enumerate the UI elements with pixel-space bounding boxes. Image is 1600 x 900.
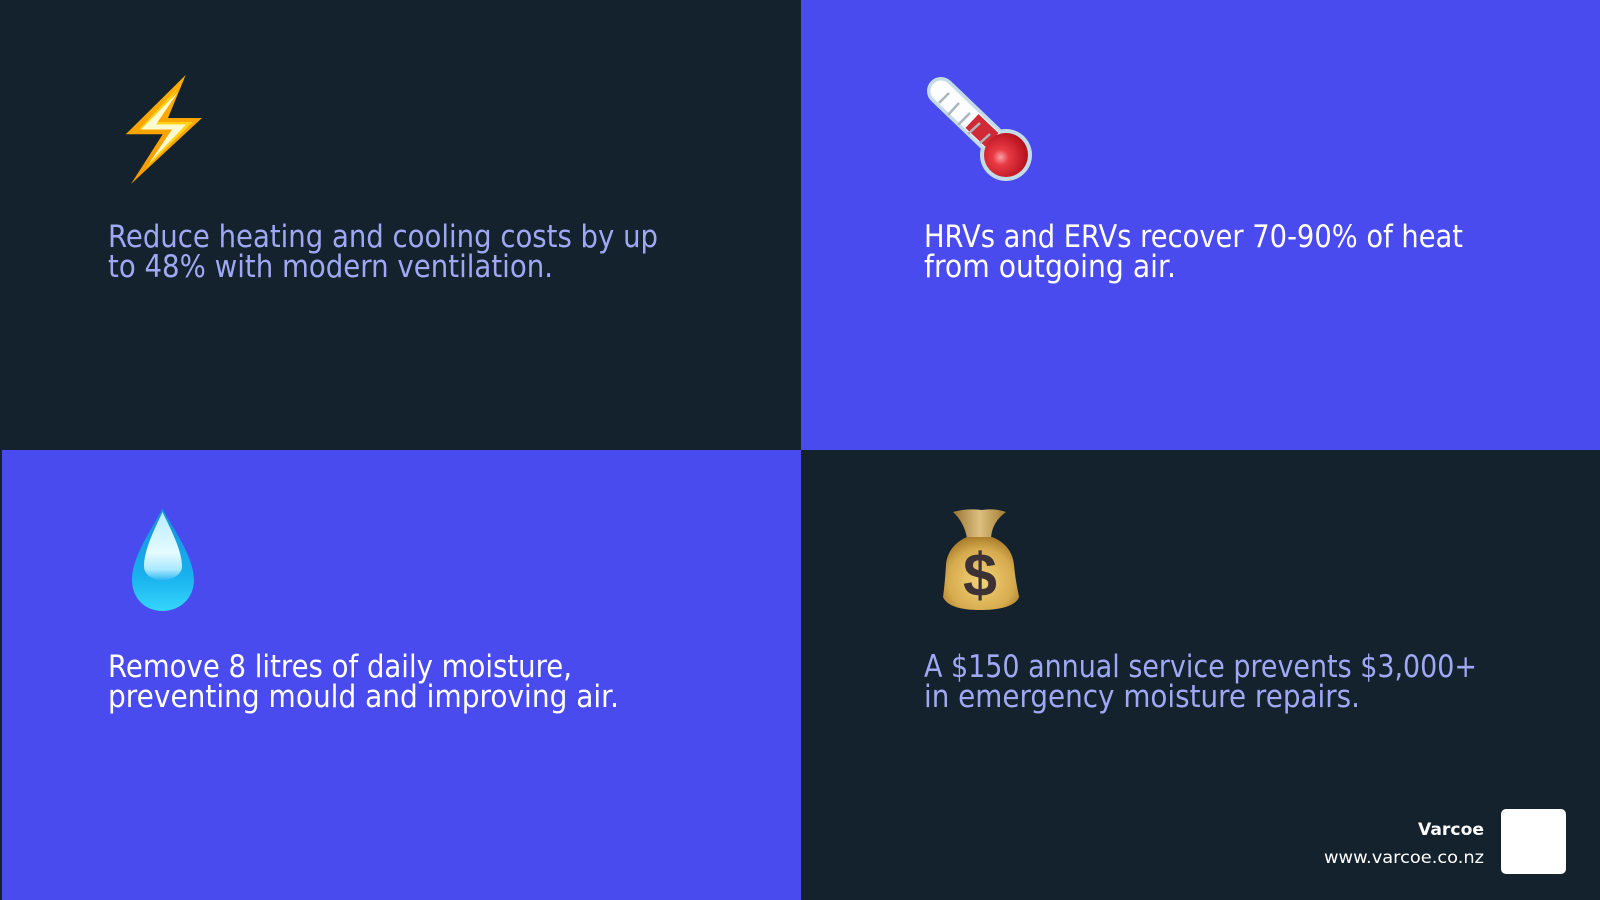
icon: water drop — [132, 508, 194, 611]
icon: thermometer — [939, 91, 1032, 181]
icon: lightning bolt — [126, 75, 202, 184]
footer: brand — [1324, 809, 1566, 874]
text: moisture removal — [108, 649, 619, 715]
text: service value: A $150 annual service prevents $3,000+ — [924, 649, 1477, 685]
text: service value — [924, 649, 1477, 715]
text: moisture removal: preventing mould and improving air. — [108, 679, 619, 715]
text: energy savings: Reduce heating and cooling costs by up — [108, 219, 658, 255]
panel: moisture removal — [2, 450, 801, 900]
text: moisture removal: Remove 8 litres of daily moisture, — [108, 649, 572, 685]
panel: energy savings — [2, 0, 801, 450]
panel: service value — [801, 450, 1600, 900]
text: heat recovery: HRVs and ERVs recover 70-90% of heat — [924, 219, 1463, 255]
icon: money bag: $ — [963, 541, 997, 609]
brand name: Varcoe — [1418, 820, 1484, 840]
text: service value: in emergency moisture repairs. — [924, 679, 1360, 715]
text: heat recovery: from outgoing air. — [924, 249, 1176, 285]
text: heat recovery — [924, 219, 1463, 285]
text: energy savings: to 48% with modern ventilation. — [108, 249, 553, 285]
text: energy savings — [108, 219, 658, 285]
panel: heat recovery — [801, 0, 1600, 450]
logo placeholder — [1501, 809, 1566, 874]
icon: money bag — [943, 509, 1019, 610]
website: www.varcoe.co.nz — [1324, 848, 1484, 868]
